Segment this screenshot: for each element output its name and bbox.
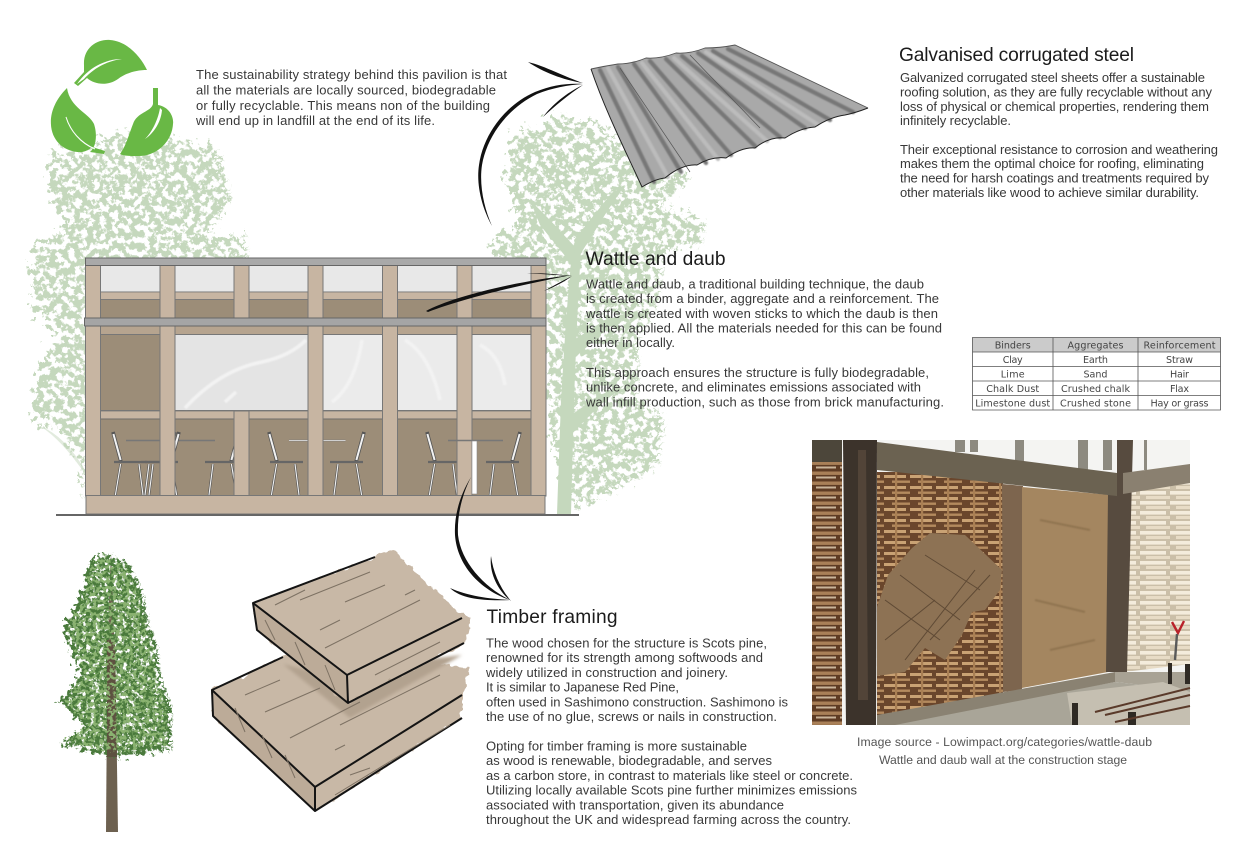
table: binders, aggregates, reinforcement: Hair <box>1170 370 1189 380</box>
timber body text: often used in Sashimono construction. Sashimono is <box>486 694 788 710</box>
wattle body text: wall infill production, such as those from brick manufacturing. <box>585 394 944 410</box>
illustration: corrugated steel sheet <box>591 45 868 187</box>
wattle body text: wattle is created with woven sticks to which the daub is then <box>585 306 938 321</box>
table: binders, aggregates, reinforcement: Sand <box>1084 370 1108 380</box>
building elevation <box>56 258 579 516</box>
timber heading and text <box>485 607 858 827</box>
illustration: Scots pine <box>60 552 172 832</box>
icon: recycling leaves <box>51 40 173 156</box>
table: binders, aggregates, reinforcement: Binders <box>995 340 1031 352</box>
table: binders, aggregates, reinforcement: Flax <box>1170 384 1189 395</box>
wattle body text: is created from a binder, aggregate and a reinforcement. The <box>586 291 939 306</box>
arrow: pavilion roof to steel <box>478 62 583 226</box>
wattle body text: unlike concrete, and eliminates emissions associated with <box>586 380 921 394</box>
steel body text: makes them the optimal choice for roofing, eliminating <box>900 156 1204 171</box>
chairs and tables <box>113 432 520 495</box>
wattle body text: Wattle and daub, a traditional building technique, the daub <box>586 276 924 292</box>
arrow: frame to timber <box>450 477 511 601</box>
upper beam and infill <box>100 292 531 334</box>
table: binders, aggregates, reinforcement: Reinforcement <box>1144 340 1216 352</box>
intro text: or fully recyclable. This means non of the building <box>196 98 490 113</box>
steel body text <box>900 70 1218 200</box>
tree silhouette: left <box>33 133 250 500</box>
intro text <box>195 67 507 128</box>
lower beam and wall infill <box>100 411 531 496</box>
timber body text: as a carbon store, in contrast to materials like steel or concrete. <box>486 768 853 783</box>
photo caption: Wattle and daub wall at the construction stage <box>879 753 1127 767</box>
wattle body text: is then applied. All the materials needed for this can be found <box>586 320 942 336</box>
photo caption: Image source - Lowimpact.org/categories/wattle-daub <box>857 735 1152 749</box>
main windows and wall panels <box>100 334 531 410</box>
table: binders, aggregates, reinforcement: Clay <box>1003 355 1023 366</box>
upper windows <box>100 265 531 292</box>
table: binders, aggregates, reinforcement: Lime <box>1001 370 1025 380</box>
wattle body text: This approach ensures the structure is fully biodegradable, <box>586 365 929 380</box>
timber body text: Opting for timber framing is more sustainable <box>486 738 747 754</box>
timber body text: Utilizing locally available Scots pine further minimizes emissions <box>486 782 858 798</box>
table: binders, aggregates, reinforcement: Chalk Dust <box>986 384 1039 395</box>
steel heading and text <box>899 45 1218 200</box>
timber body text: as wood is renewable, biodegradable, and serves <box>486 753 772 768</box>
steel body text: Galvanized corrugated steel sheets offer a sustainable <box>900 70 1205 85</box>
timber body text: It is similar to Japanese Red Pine, <box>486 680 679 694</box>
steel body text: infinitely recyclable. <box>900 113 1011 128</box>
base plinth <box>86 496 545 514</box>
tree silhouette: right <box>487 117 707 514</box>
timber body text: The wood chosen for the structure is Scots pine, <box>486 636 767 650</box>
wattle body text <box>585 276 944 410</box>
steel body text: the need for harsh coatings and treatments required by <box>900 170 1210 186</box>
intro text: will end up in landfill at the end of its life. <box>195 113 435 128</box>
timber body text: renowned for its strength among softwoods and <box>486 650 763 665</box>
timber posts <box>86 265 546 496</box>
timber body text: widely utilized in construction and joinery. <box>485 665 728 680</box>
steel body text: Their exceptional resistance to corrosion and weathering <box>900 142 1218 157</box>
wattle body text: either in locally. <box>586 335 675 350</box>
table: binders, aggregates, reinforcement: Crushed chalk <box>1061 384 1130 395</box>
table: binders, aggregates, reinforcement: Straw <box>1166 355 1193 366</box>
table: binders, aggregates, reinforcement: Crushed stone <box>1060 398 1131 410</box>
arrow: wall to wattle and daub <box>426 273 572 312</box>
timber body text <box>485 636 858 827</box>
wattle and daub heading and text <box>585 249 944 410</box>
roof band <box>86 258 546 266</box>
table: binders, aggregates, reinforcement <box>972 338 1220 410</box>
upper board <box>253 550 472 703</box>
lower board <box>212 650 470 811</box>
table: binders, aggregates, reinforcement: Earth <box>1083 355 1108 366</box>
table: binders, aggregates, reinforcement: Aggregates <box>1068 340 1124 352</box>
timber body text: associated with transportation, given its abundance <box>486 798 784 812</box>
wattle and daub heading and text: Wattle and daub <box>586 249 726 270</box>
timber body text: throughout the UK and widespread farming across the country. <box>486 812 851 827</box>
photo caption <box>857 735 1152 767</box>
table in front of post <box>448 440 503 494</box>
steel body text: other materials like wood to achieve similar durability. <box>900 185 1199 200</box>
table: binders, aggregates, reinforcement: Limestone dust <box>975 398 1050 410</box>
illustration: timber boards <box>212 550 472 811</box>
mid rail <box>84 318 546 326</box>
intro text: The sustainability strategy behind this pavilion is that <box>196 67 507 82</box>
ground line <box>56 514 579 516</box>
steel body text: roofing solution, as they are fully recyclable without any <box>900 84 1212 100</box>
photo: wattle and daub wall <box>812 440 1190 725</box>
steel body text: loss of physical or chemical properties, rendering them <box>900 99 1209 114</box>
timber body text: the use of no glue, screws or nails in construction. <box>486 709 777 724</box>
timber heading and text: Timber framing <box>486 607 618 628</box>
table: binders, aggregates, reinforcement: Hay or grass <box>1150 398 1208 410</box>
steel heading and text: Galvanised corrugated steel <box>899 45 1134 66</box>
intro text: all the materials are locally sourced, biodegradable <box>196 82 496 98</box>
